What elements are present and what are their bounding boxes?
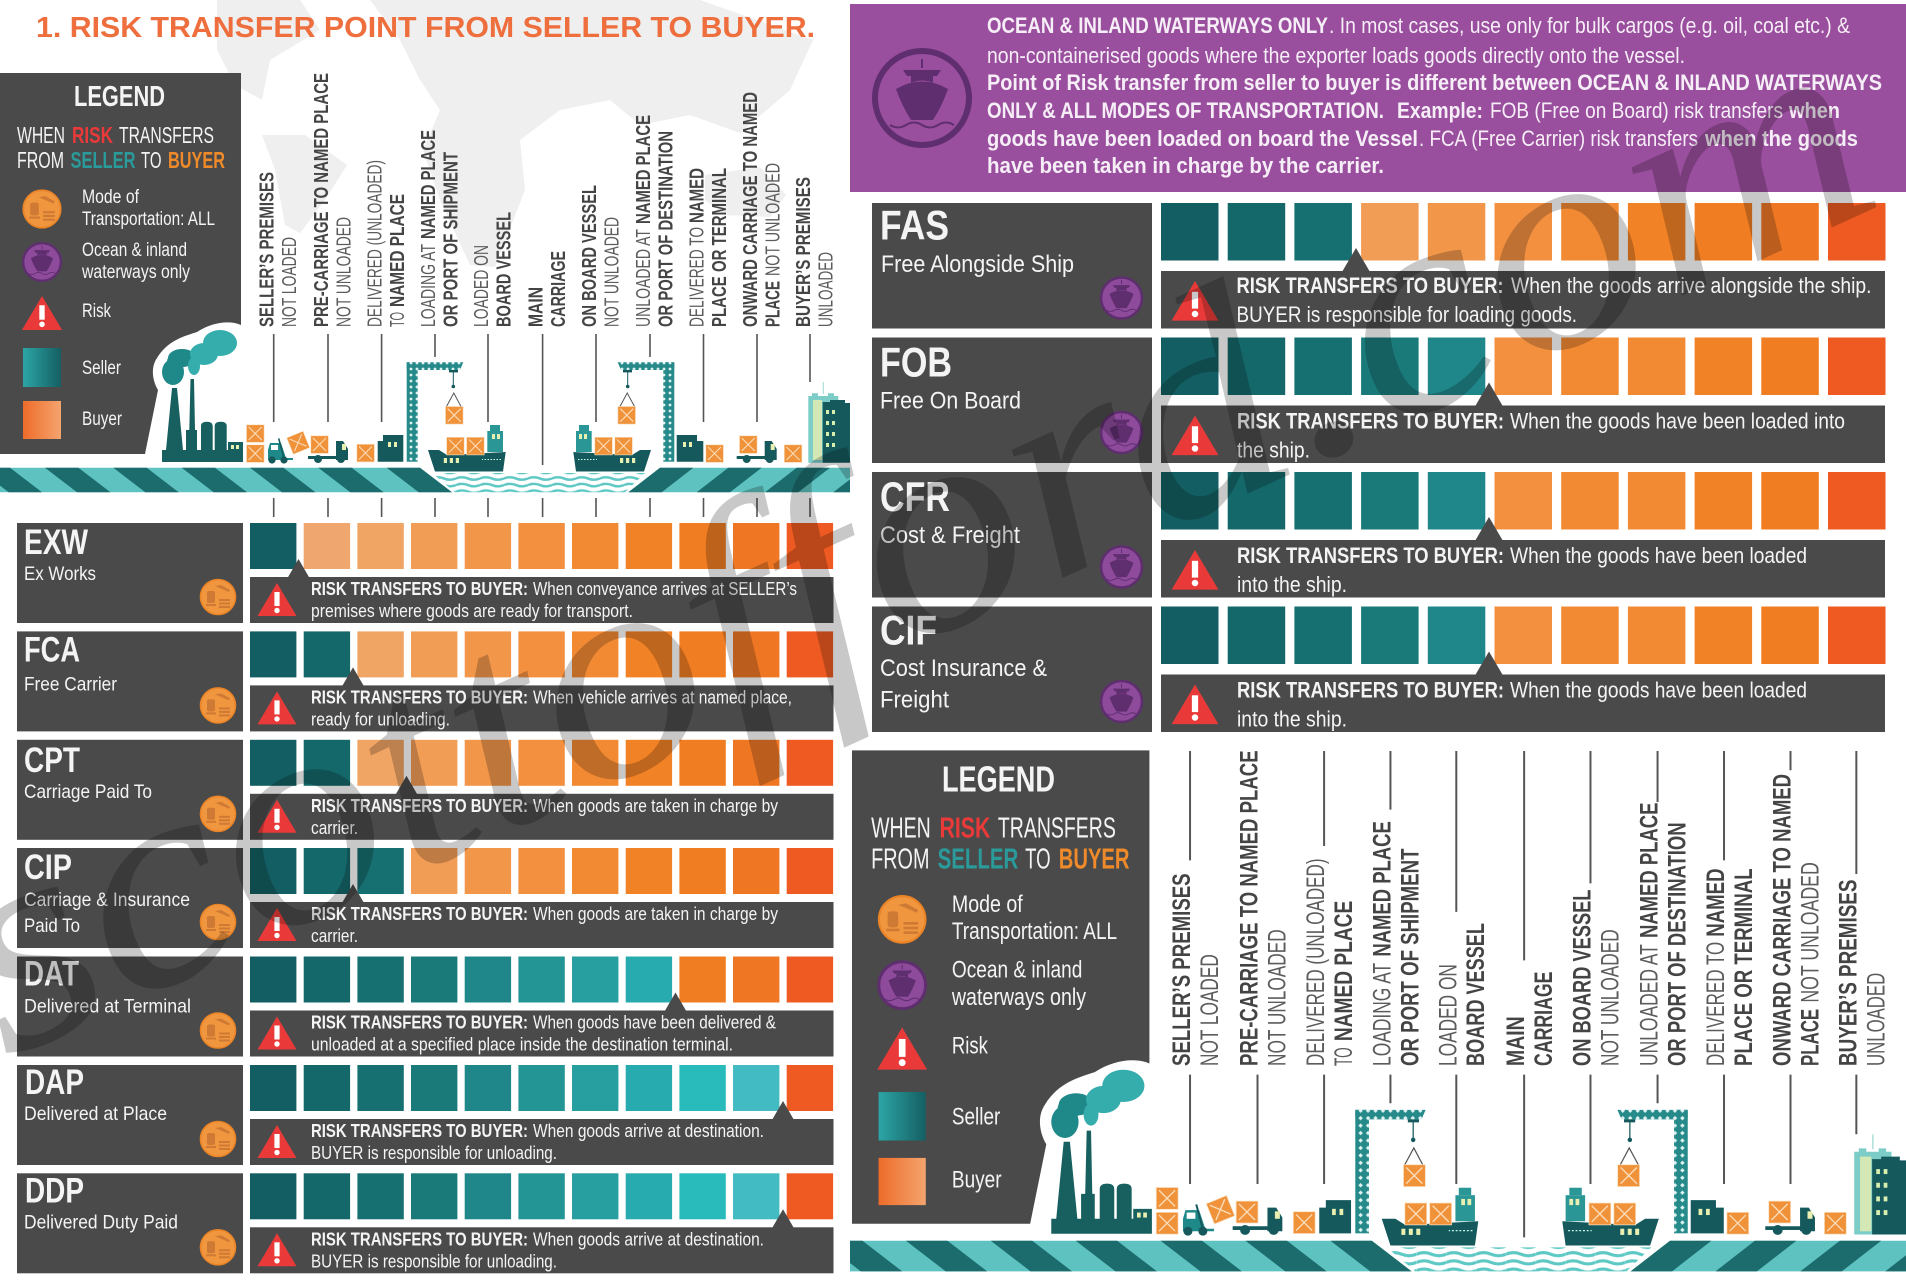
rotated stage labels (bottom right): PRE-CARRIAGE TO NAMED PLACE	[1237, 750, 1264, 1066]
panel: FAS row	[872, 202, 1886, 328]
rotated stage labels (top left): SELLER’S PREMISES	[257, 172, 279, 327]
panel: FAS row: RISK TRANSFERS TO BUYER:	[1236, 273, 1504, 298]
panel: DDP row: DDP	[25, 1171, 84, 1210]
panel: FCA row: RISK TRANSFERS TO BUYER:	[311, 686, 528, 707]
panel: DDP row: Delivered Duty Paid	[24, 1211, 178, 1233]
legend item labels: Seller	[82, 358, 122, 379]
legend item labels: Mode of	[82, 187, 140, 208]
swatch: buyer	[23, 401, 61, 439]
panel: CIP row: CIP	[24, 848, 72, 887]
panel: CIF row: into the ship.	[1237, 706, 1347, 732]
right legend subtitle: RISK	[939, 812, 991, 844]
note text: . FCA (Free Carrier) risk transfers	[1419, 126, 1698, 151]
rotated stage labels (bottom right): NAMED PLACE	[1637, 803, 1664, 938]
tick marks under road	[274, 498, 810, 517]
rotated stage labels (top left): ONWARD CARRIAGE TO NAMED	[740, 92, 762, 327]
rotated stage labels (top left): LOADING AT	[418, 244, 440, 327]
rotated stage labels (bottom right): ONWARD CARRIAGE TO NAMED	[1769, 774, 1796, 1066]
right legend subtitle: SELLER	[938, 843, 1019, 875]
panel: left legend and scene	[0, 73, 241, 454]
panel: DAT row: DAT	[24, 954, 79, 994]
panel: FCA row	[17, 630, 834, 731]
legend subtitle: SELLER	[70, 147, 136, 173]
rotated stage labels (top left): CARRIAGE	[548, 251, 570, 327]
panel: EXW row: RISK TRANSFERS TO BUYER:	[311, 578, 528, 599]
note text: non-containerised goods where the exporter loads goods directly onto the vessel.	[987, 43, 1685, 68]
legend item labels: Transportation: ALL	[82, 209, 215, 230]
rotated stage labels (bottom right): DELIVERED (UNLOADED)	[1303, 858, 1330, 1066]
rotated stage labels (bottom right): BUYER’S PREMISES	[1835, 880, 1862, 1066]
legend subtitle: TO	[141, 147, 162, 173]
panel: CIP row	[17, 848, 834, 948]
panel: CFR row: RISK TRANSFERS TO BUYER:	[1237, 543, 1504, 568]
right swatch: buyer	[879, 1158, 926, 1205]
panel: DAP row	[17, 1063, 834, 1165]
panel: FAS row: BUYER is responsible for loading goods.	[1236, 302, 1577, 327]
panel: FOB row	[872, 338, 1886, 463]
panel: CIF row: RISK TRANSFERS TO BUYER:	[1237, 678, 1504, 702]
world map background	[217, 0, 813, 267]
panel: CIF row: When the goods have been loaded	[1510, 678, 1807, 702]
panel: CPT row: CPT	[24, 741, 80, 780]
note text	[987, 13, 1882, 178]
panel: FCA row: When vehicle arrives at named place,	[533, 686, 792, 707]
rotated stage labels (top left): NOT UNLOADED	[602, 217, 624, 327]
legend background	[0, 73, 241, 454]
panel: DAT row	[17, 954, 834, 1056]
panel: FAS row: FAS	[880, 202, 949, 248]
right swatch: seller	[879, 1092, 926, 1141]
panel: CFR row: Cost & Freight	[880, 522, 1020, 549]
panel: EXW row: premises where goods are ready for transport.	[311, 600, 633, 621]
panel: EXW row	[17, 523, 834, 623]
panel: CIF row: Cost Insurance &	[880, 655, 1047, 682]
panel: FOB row: Free On Board	[880, 388, 1021, 414]
rotated stage labels (top left): NOT UNLOADED	[334, 217, 356, 327]
legend heading: LEGEND	[74, 81, 165, 113]
panel: FAS row: Free Alongside Ship	[881, 251, 1074, 278]
rotated stage labels (top left): BOARD VESSEL	[494, 212, 516, 327]
right legend item labels	[951, 892, 1117, 1194]
panel: CIP row: Carriage & Insurance	[24, 889, 190, 911]
illustration: transport scene (bottom right)	[821, 1070, 1906, 1271]
rotated stage labels (bottom right): NOT LOADED	[1197, 954, 1224, 1066]
rotated stage labels (top left): OR PORT OF DESTINATION	[656, 131, 678, 327]
legend item labels: Risk	[82, 301, 111, 322]
note text: have been taken in charge by the carrier.	[987, 153, 1384, 178]
rotated stage labels (top left): BUYER’S PREMISES	[793, 177, 815, 327]
legend item labels	[81, 187, 215, 430]
note text: when the goods	[1704, 126, 1858, 151]
rotated stage labels (top left): UNLOADED AT	[633, 229, 655, 327]
rotated stage labels (top left): NAMED	[686, 168, 708, 223]
panel: DAP row: BUYER is responsible for unloading.	[311, 1142, 557, 1163]
right legend subtitle: BUYER	[1059, 843, 1130, 875]
right legend subtitle: TO	[1025, 843, 1051, 875]
panel: CFR row	[872, 472, 1886, 598]
panel: DAT row: unloaded at a specified place inside the destination terminal.	[311, 1034, 733, 1054]
note text: . In most cases, use only for bulk cargos (e.g. oil, coal etc.) &	[1329, 13, 1850, 38]
right legend item labels: Seller	[952, 1104, 1000, 1130]
panel: FOB row: When the goods have been loaded into	[1510, 408, 1845, 434]
rotated stage labels (bottom right): SELLER’S PREMISES	[1169, 873, 1196, 1066]
legend subtitle: RISK	[72, 122, 113, 148]
panel: CFR row: CFR	[880, 473, 950, 520]
rotated stage labels (top left): NAMED PLACE	[633, 115, 655, 224]
rotated stage labels (top left): NOT UNLOADED	[762, 163, 784, 276]
panel: CFR row: When the goods have been loaded	[1510, 543, 1807, 568]
rotated stage labels (bottom right): LOADED ON	[1435, 964, 1462, 1066]
rotated stage labels (top left): ON BOARD VESSEL	[579, 185, 601, 327]
rotated stage labels (top left): PLACE OR TERMINAL	[709, 168, 731, 327]
rotated stage labels (bottom right): PLACE	[1797, 1009, 1824, 1066]
rotated stage labels (bottom right): UNLOADED	[1863, 973, 1890, 1066]
panel: ocean and inland waterways note	[850, 4, 1906, 192]
panel: FOB row: the ship.	[1237, 438, 1310, 462]
rotated stage labels (bottom right): DELIVERED TO	[1703, 942, 1730, 1066]
right legend item labels: Buyer	[952, 1168, 1002, 1194]
right icon: ocean and inland	[879, 962, 926, 1009]
rotated stage labels (bottom right): NAMED	[1703, 868, 1730, 937]
swatch: seller	[23, 348, 61, 387]
title: 1. RISK TRANSFER POINT FROM SELLER TO BUYER.	[36, 12, 815, 44]
rotated stage labels (bottom right): NOT UNLOADED	[1597, 929, 1624, 1066]
panel: DAP row: RISK TRANSFERS TO BUYER:	[311, 1120, 528, 1141]
note text: ONLY & ALL MODES OF TRANSPORTATION.	[987, 98, 1384, 123]
rotated stage labels (bottom right): OR PORT OF SHIPMENT	[1397, 849, 1424, 1066]
right legend item labels: waterways only	[951, 985, 1086, 1011]
right legend heading: LEGEND	[942, 758, 1055, 799]
panel: CIP row: When goods are taken in charge by	[533, 903, 779, 924]
panel: DAT row: Delivered at Terminal	[24, 996, 191, 1018]
panel: CPT row: Carriage Paid To	[24, 781, 152, 803]
rotated stage labels (top left): LOADED ON	[471, 245, 493, 327]
rotated stage labels (bottom right): NOT UNLOADED	[1797, 862, 1824, 1003]
panel: FCA row: ready for unloading.	[311, 708, 450, 729]
panel: FOB row: FOB	[880, 338, 952, 386]
right legend subtitle: TRANSFERS	[998, 812, 1116, 844]
legend subtitle: BUYER	[168, 147, 225, 173]
rotated stage labels (bottom right): NAMED PLACE	[1369, 821, 1396, 957]
panel: CIF row: Freight	[880, 686, 949, 714]
rotated stage labels (bottom right): OR PORT OF DESTINATION	[1665, 822, 1692, 1066]
rotated stage labels (bottom right): ON BOARD VESSEL	[1569, 890, 1596, 1066]
panel: FCA row: Free Carrier	[24, 673, 117, 695]
panel: CPT row	[17, 740, 834, 840]
rotated stage labels (bottom right): NOT UNLOADED	[1264, 929, 1291, 1066]
panel: DDP row: RISK TRANSFERS TO BUYER:	[311, 1228, 528, 1249]
panel: DAT row: When goods have been delivered &	[533, 1012, 777, 1032]
note text: when	[1788, 98, 1840, 123]
rotated stage labels (bottom right): BOARD VESSEL	[1463, 923, 1490, 1066]
leader lines above labels	[1190, 751, 1856, 960]
rotated stage labels (top left): NAMED PLACE	[418, 130, 440, 239]
legend item labels: Ocean & inland	[82, 240, 187, 261]
rotated stage labels (top left): PLACE	[762, 281, 784, 327]
note text: FOB (Free on Board) risk transfers	[1490, 98, 1783, 123]
right legend item labels: Transportation: ALL	[952, 919, 1117, 945]
icon: ocean and inland	[23, 243, 61, 281]
rotated stage labels (bottom right)	[1169, 750, 1890, 1066]
panel: right legend and scene	[821, 750, 1906, 1271]
rotated stage labels (bottom right): CARRIAGE	[1531, 972, 1558, 1066]
panel: CPT row: carrier.	[311, 817, 358, 838]
panel: FOB row: RISK TRANSFERS TO BUYER:	[1237, 408, 1504, 434]
panel: EXW row: Ex Works	[24, 563, 96, 585]
right legend background	[852, 750, 1149, 1224]
icon: risk	[22, 296, 62, 330]
rotated stage labels (bottom right): MAIN	[1503, 1016, 1530, 1066]
panel: CIF row: CIF	[880, 606, 937, 654]
legend subtitle: FROM	[17, 147, 64, 173]
rotated stage labels (top left): DELIVERED TO	[686, 227, 708, 327]
panel: DDP row: When goods arrive at destination.	[533, 1228, 764, 1249]
legend item labels: waterways only	[81, 262, 190, 283]
panel: CIP row: carrier.	[311, 925, 358, 946]
right legend subtitle	[871, 812, 1130, 875]
note text: Example:	[1397, 98, 1483, 123]
panel: CFR row: into the ship.	[1237, 572, 1347, 597]
rotated stage labels (top left): NOT LOADED	[279, 237, 301, 327]
rotated stage labels (bottom right): LOADING AT	[1369, 963, 1396, 1066]
rotated stage labels (bottom right): PLACE OR TERMINAL	[1731, 868, 1758, 1066]
panel: DAP row: Delivered at Place	[24, 1103, 167, 1125]
rotated stage labels (top left): DELIVERED (UNLOADED)	[365, 160, 387, 327]
rotated stage labels (top left): NAMED PLACE	[387, 194, 409, 307]
right icon: risk	[877, 1027, 927, 1070]
panel: CPT row: RISK TRANSFERS TO BUYER:	[311, 795, 528, 816]
rotated stage labels (bottom right): TO	[1331, 1047, 1358, 1066]
right legend subtitle: WHEN	[871, 812, 931, 844]
right legend item labels: Ocean & inland	[952, 958, 1082, 984]
panel: EXW row: EXW	[24, 523, 88, 562]
panel: FCA row: FCA	[24, 630, 80, 669]
right legend item labels: Risk	[952, 1034, 988, 1060]
right icon: all modes	[879, 896, 925, 943]
rotated stage labels (top left): TO	[387, 312, 409, 327]
right legend subtitle: FROM	[871, 843, 930, 875]
panel: CPT row: When goods are taken in charge by	[533, 795, 779, 816]
rotated stage labels (top left): OR PORT OF SHIPMENT	[440, 152, 462, 327]
note text: goods have been loaded on board the Vessel	[987, 126, 1418, 151]
rotated stage labels (bottom right): NAMED PLACE	[1331, 901, 1358, 1041]
rotated stage labels (top left): MAIN	[526, 287, 548, 327]
panel: DDP row: BUYER is responsible for unloading.	[311, 1250, 557, 1271]
panel: DAP row: DAP	[25, 1063, 84, 1102]
icon: all modes	[23, 190, 61, 228]
panel: DAP row: When goods arrive at destination.	[533, 1120, 764, 1141]
panel: CIF row	[872, 606, 1886, 732]
panel: CIP row: Paid To	[24, 915, 80, 937]
rotated stage labels (top left)	[257, 73, 838, 327]
rotated stage labels (bottom right): UNLOADED AT	[1637, 944, 1664, 1066]
legend subtitle	[17, 122, 225, 173]
right legend item labels: Mode of	[952, 892, 1023, 918]
icon: ship in ring	[875, 51, 969, 145]
legend subtitle: WHEN	[17, 122, 65, 148]
illustration: transport scene (top left)	[0, 330, 898, 492]
legend item labels: Buyer	[82, 409, 123, 430]
note text: OCEAN & INLAND WATERWAYS ONLY	[987, 13, 1328, 38]
panel: CIP row: RISK TRANSFERS TO BUYER:	[311, 903, 528, 924]
panel: EXW row: When conveyance arrives at SELLER’s	[533, 578, 797, 599]
panel: DAT row: RISK TRANSFERS TO BUYER:	[311, 1012, 528, 1032]
legend subtitle: TRANSFERS	[119, 122, 214, 148]
rotated stage labels (top left): UNLOADED	[816, 252, 838, 327]
panel: DDP row	[17, 1171, 834, 1273]
